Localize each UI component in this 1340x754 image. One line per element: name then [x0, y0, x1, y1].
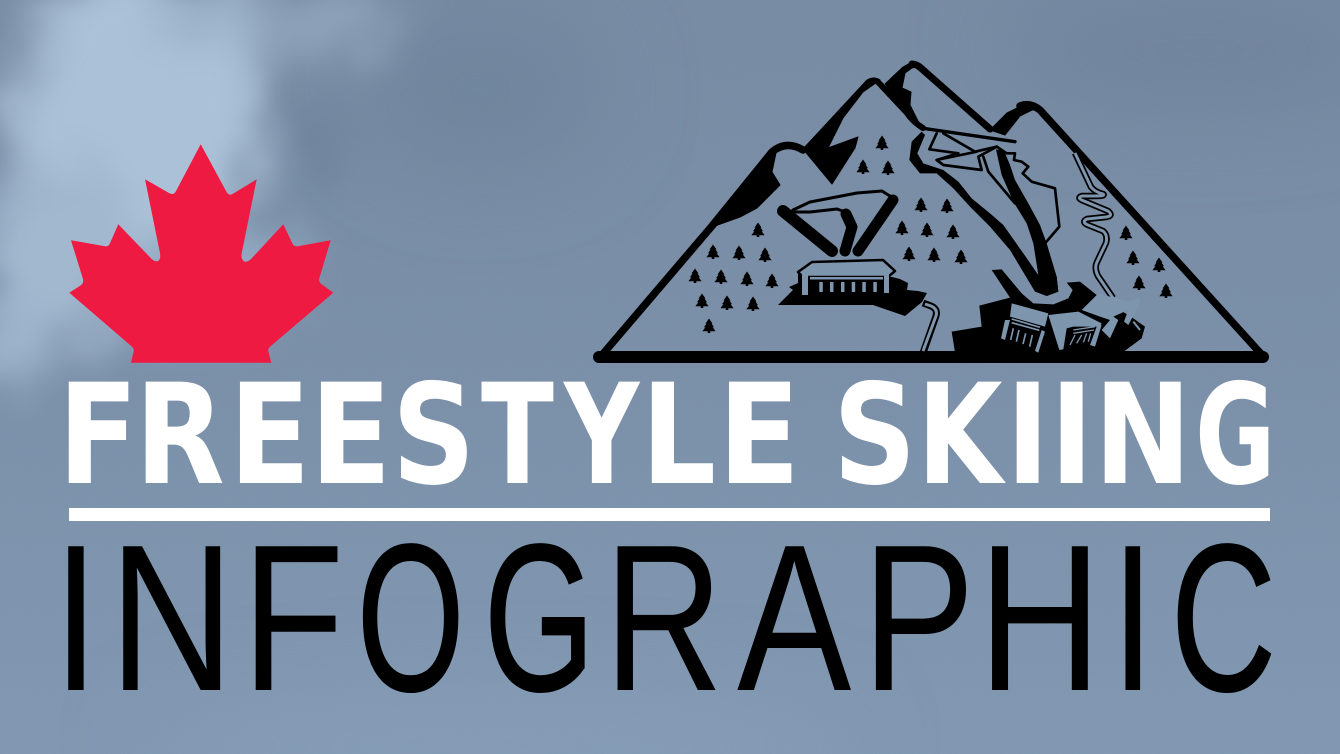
- trees: [688, 136, 1173, 333]
- text: A: [737, 502, 851, 735]
- text: I: [1006, 354, 1050, 516]
- title: FREESTYLE SKIING: [58, 354, 1276, 516]
- text: F: [242, 502, 344, 735]
- text: I: [53, 502, 99, 735]
- text: L: [641, 354, 716, 516]
- text: S: [392, 354, 476, 516]
- text: C: [1171, 502, 1276, 735]
- text: G: [484, 502, 594, 735]
- text: E: [310, 354, 391, 516]
- text: G: [1195, 354, 1276, 516]
- text: F: [58, 354, 138, 516]
- text: E: [718, 354, 800, 516]
- aerials lodge: [778, 260, 936, 353]
- text: T: [480, 354, 553, 516]
- text: I: [1111, 502, 1155, 735]
- text: S: [833, 354, 917, 516]
- subtitle: INFOGRAPHIC: [53, 502, 1276, 735]
- text: N: [109, 502, 234, 735]
- text: I: [1050, 354, 1093, 516]
- aerials course: [783, 191, 893, 251]
- moguls and halfpipe base buildings: [952, 269, 1145, 353]
- text: O: [356, 502, 464, 735]
- text: P: [862, 502, 975, 735]
- text: R: [135, 354, 225, 516]
- text: N: [1094, 354, 1192, 516]
- text: Y: [564, 354, 639, 516]
- text: H: [978, 502, 1102, 735]
- text: E: [229, 354, 310, 516]
- text: K: [917, 354, 1002, 516]
- moguls course: [909, 120, 1059, 296]
- road: [1075, 153, 1113, 298]
- text: R: [604, 502, 723, 735]
